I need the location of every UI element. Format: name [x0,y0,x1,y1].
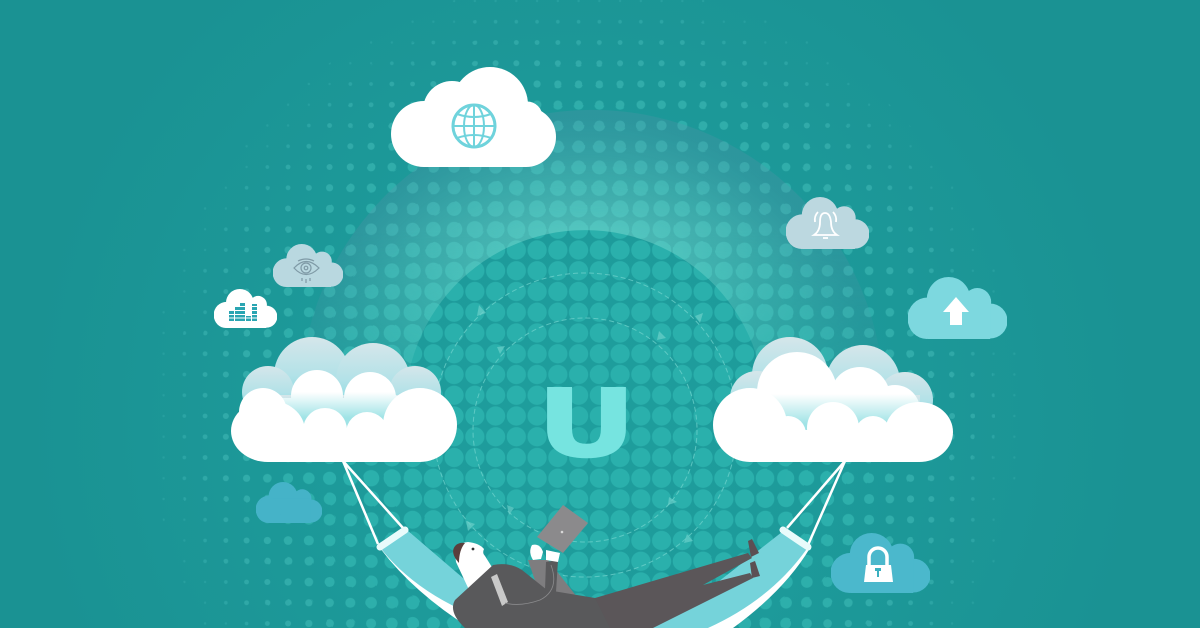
letter U logo: U [537,369,636,478]
raised sleeve [528,560,558,606]
tablet [537,505,588,553]
icon: globe [453,105,495,147]
eye [472,548,474,550]
large cloud: right [713,337,953,462]
cloud: lock [831,533,930,593]
icon: padlock [864,548,893,582]
large cloud: left [231,337,457,462]
back layer [730,337,933,428]
glowing halo ring [310,110,874,367]
head and neck [456,542,495,592]
icon: bell [814,212,837,238]
tie [491,574,508,606]
halftone dot field [150,0,1020,628]
cloud: upload arrow [908,277,1007,339]
middle layer [275,370,405,432]
front layer [713,388,953,462]
cloud: bell [786,197,869,249]
dashed orbit circles [433,273,737,577]
icon: eye [294,259,319,283]
back layer [242,337,441,425]
cloud: plain [256,482,322,523]
cloud: equalizer [214,289,277,328]
middle layer [757,352,920,436]
shoes [748,539,760,578]
hammock spreader bar right [783,530,808,547]
hammock ropes left [343,461,403,544]
hammock fabric [382,530,806,628]
icon: equalizer bars [228,303,258,321]
earphone wire [505,565,554,604]
suit jacket [453,564,610,628]
icon: up arrow [943,297,969,325]
illustration: businessman relaxing in a hammock between clouds [162,0,1016,628]
businessman [453,505,760,628]
hammock [343,461,845,628]
cloud: globe [391,67,556,167]
tablet dot [561,531,563,533]
cloud: eye [273,244,343,287]
lighter arm behind [528,560,590,610]
front layer [231,388,457,462]
hair [453,543,465,563]
hands [530,545,560,562]
trousers [540,553,753,628]
hammock ropes right [787,461,845,545]
hammock spreader bar left [380,530,405,547]
hammock white underside [380,548,810,628]
orbit arrowheads [466,305,703,543]
